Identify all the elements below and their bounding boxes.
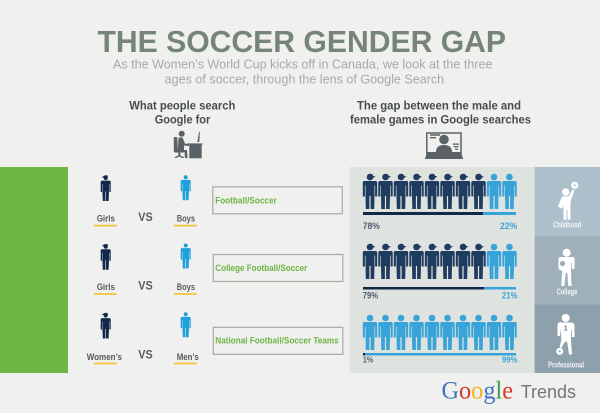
value: 99%: 99%: [502, 354, 518, 364]
search term box: [213, 254, 343, 282]
split bar: [363, 212, 516, 215]
value: 79%: 79%: [363, 291, 378, 301]
split bar: [363, 287, 516, 290]
icon: child with ball: [558, 182, 578, 220]
logo: google trends: [442, 378, 576, 405]
subtitle: ages of soccer, through the lens of Google Search: [165, 72, 444, 86]
icon: men: [181, 312, 191, 337]
icon: person at desk: [174, 131, 202, 158]
heading: the gap: [350, 100, 531, 126]
pictogram row: [363, 244, 517, 279]
icon: laptop with person: [425, 133, 463, 159]
heading: what people search: [129, 100, 235, 126]
icon: girl: [101, 244, 111, 270]
search term box: [213, 327, 343, 354]
panel: professional: [534, 304, 600, 373]
subtitle: As the Women’s World Cup kicks off in Canada, we look at the three: [113, 57, 493, 71]
title: THE SOCCER GENDER GAP: [98, 24, 506, 59]
label: vs: VS: [138, 347, 153, 361]
value: 21%: 21%: [502, 291, 518, 301]
search term box: National Football/Soccer Teams: [215, 336, 339, 347]
label: men's: Men’s: [177, 352, 199, 362]
icon: women: [101, 313, 111, 338]
icon: boy: [181, 175, 191, 200]
value: 1%: 1%: [363, 354, 374, 364]
label: vs: VS: [138, 210, 153, 224]
heading: the gap: The gap between the male and: [357, 100, 521, 112]
panel: college: [534, 236, 600, 304]
split bar: [363, 353, 516, 356]
pictogram row: [363, 174, 517, 209]
row: professional comparison: [87, 312, 343, 364]
label: college: College: [557, 287, 578, 296]
label: boys: Boys: [177, 282, 195, 292]
value: 78%: 78%: [363, 221, 380, 231]
heading: what people search: Google for: [155, 114, 211, 126]
heading: the gap: female games in Google searches: [350, 114, 531, 126]
subtitle: [113, 57, 493, 86]
icon: boy: [181, 244, 191, 268]
icon: professional player: 1: [564, 326, 568, 332]
value: 22%: 22%: [500, 221, 517, 231]
icon: college player: [558, 249, 574, 286]
label: vs: VS: [138, 278, 153, 292]
label: professional: Professional: [548, 360, 584, 369]
chart: college 79/21: [363, 244, 518, 301]
row: childhood comparison: [94, 175, 342, 226]
search term box: [213, 187, 342, 214]
logo: google trends: Trends: [521, 382, 576, 402]
heading: what people search: What people search: [129, 100, 235, 112]
panel: gap chart background: [350, 167, 534, 373]
chart: professional 1/99: [363, 315, 518, 364]
label: childhood: Childhood: [553, 221, 581, 230]
icon: girl: [101, 175, 111, 201]
search term box: Football/Soccer: [215, 195, 277, 206]
pictogram row: [363, 315, 517, 350]
label: girls: Girls: [97, 214, 115, 224]
logo: google trends: Google: [442, 378, 513, 405]
label: girls: Girls: [97, 282, 115, 292]
panel: childhood: [534, 167, 600, 236]
panel: green sidebar: [0, 167, 68, 373]
row: college comparison: [94, 244, 343, 295]
label: boys: Boys: [177, 214, 195, 224]
chart: childhood 78/22: [363, 174, 517, 231]
label: women's: Women’s: [87, 352, 122, 362]
search term box: College Football/Soccer: [215, 263, 308, 274]
